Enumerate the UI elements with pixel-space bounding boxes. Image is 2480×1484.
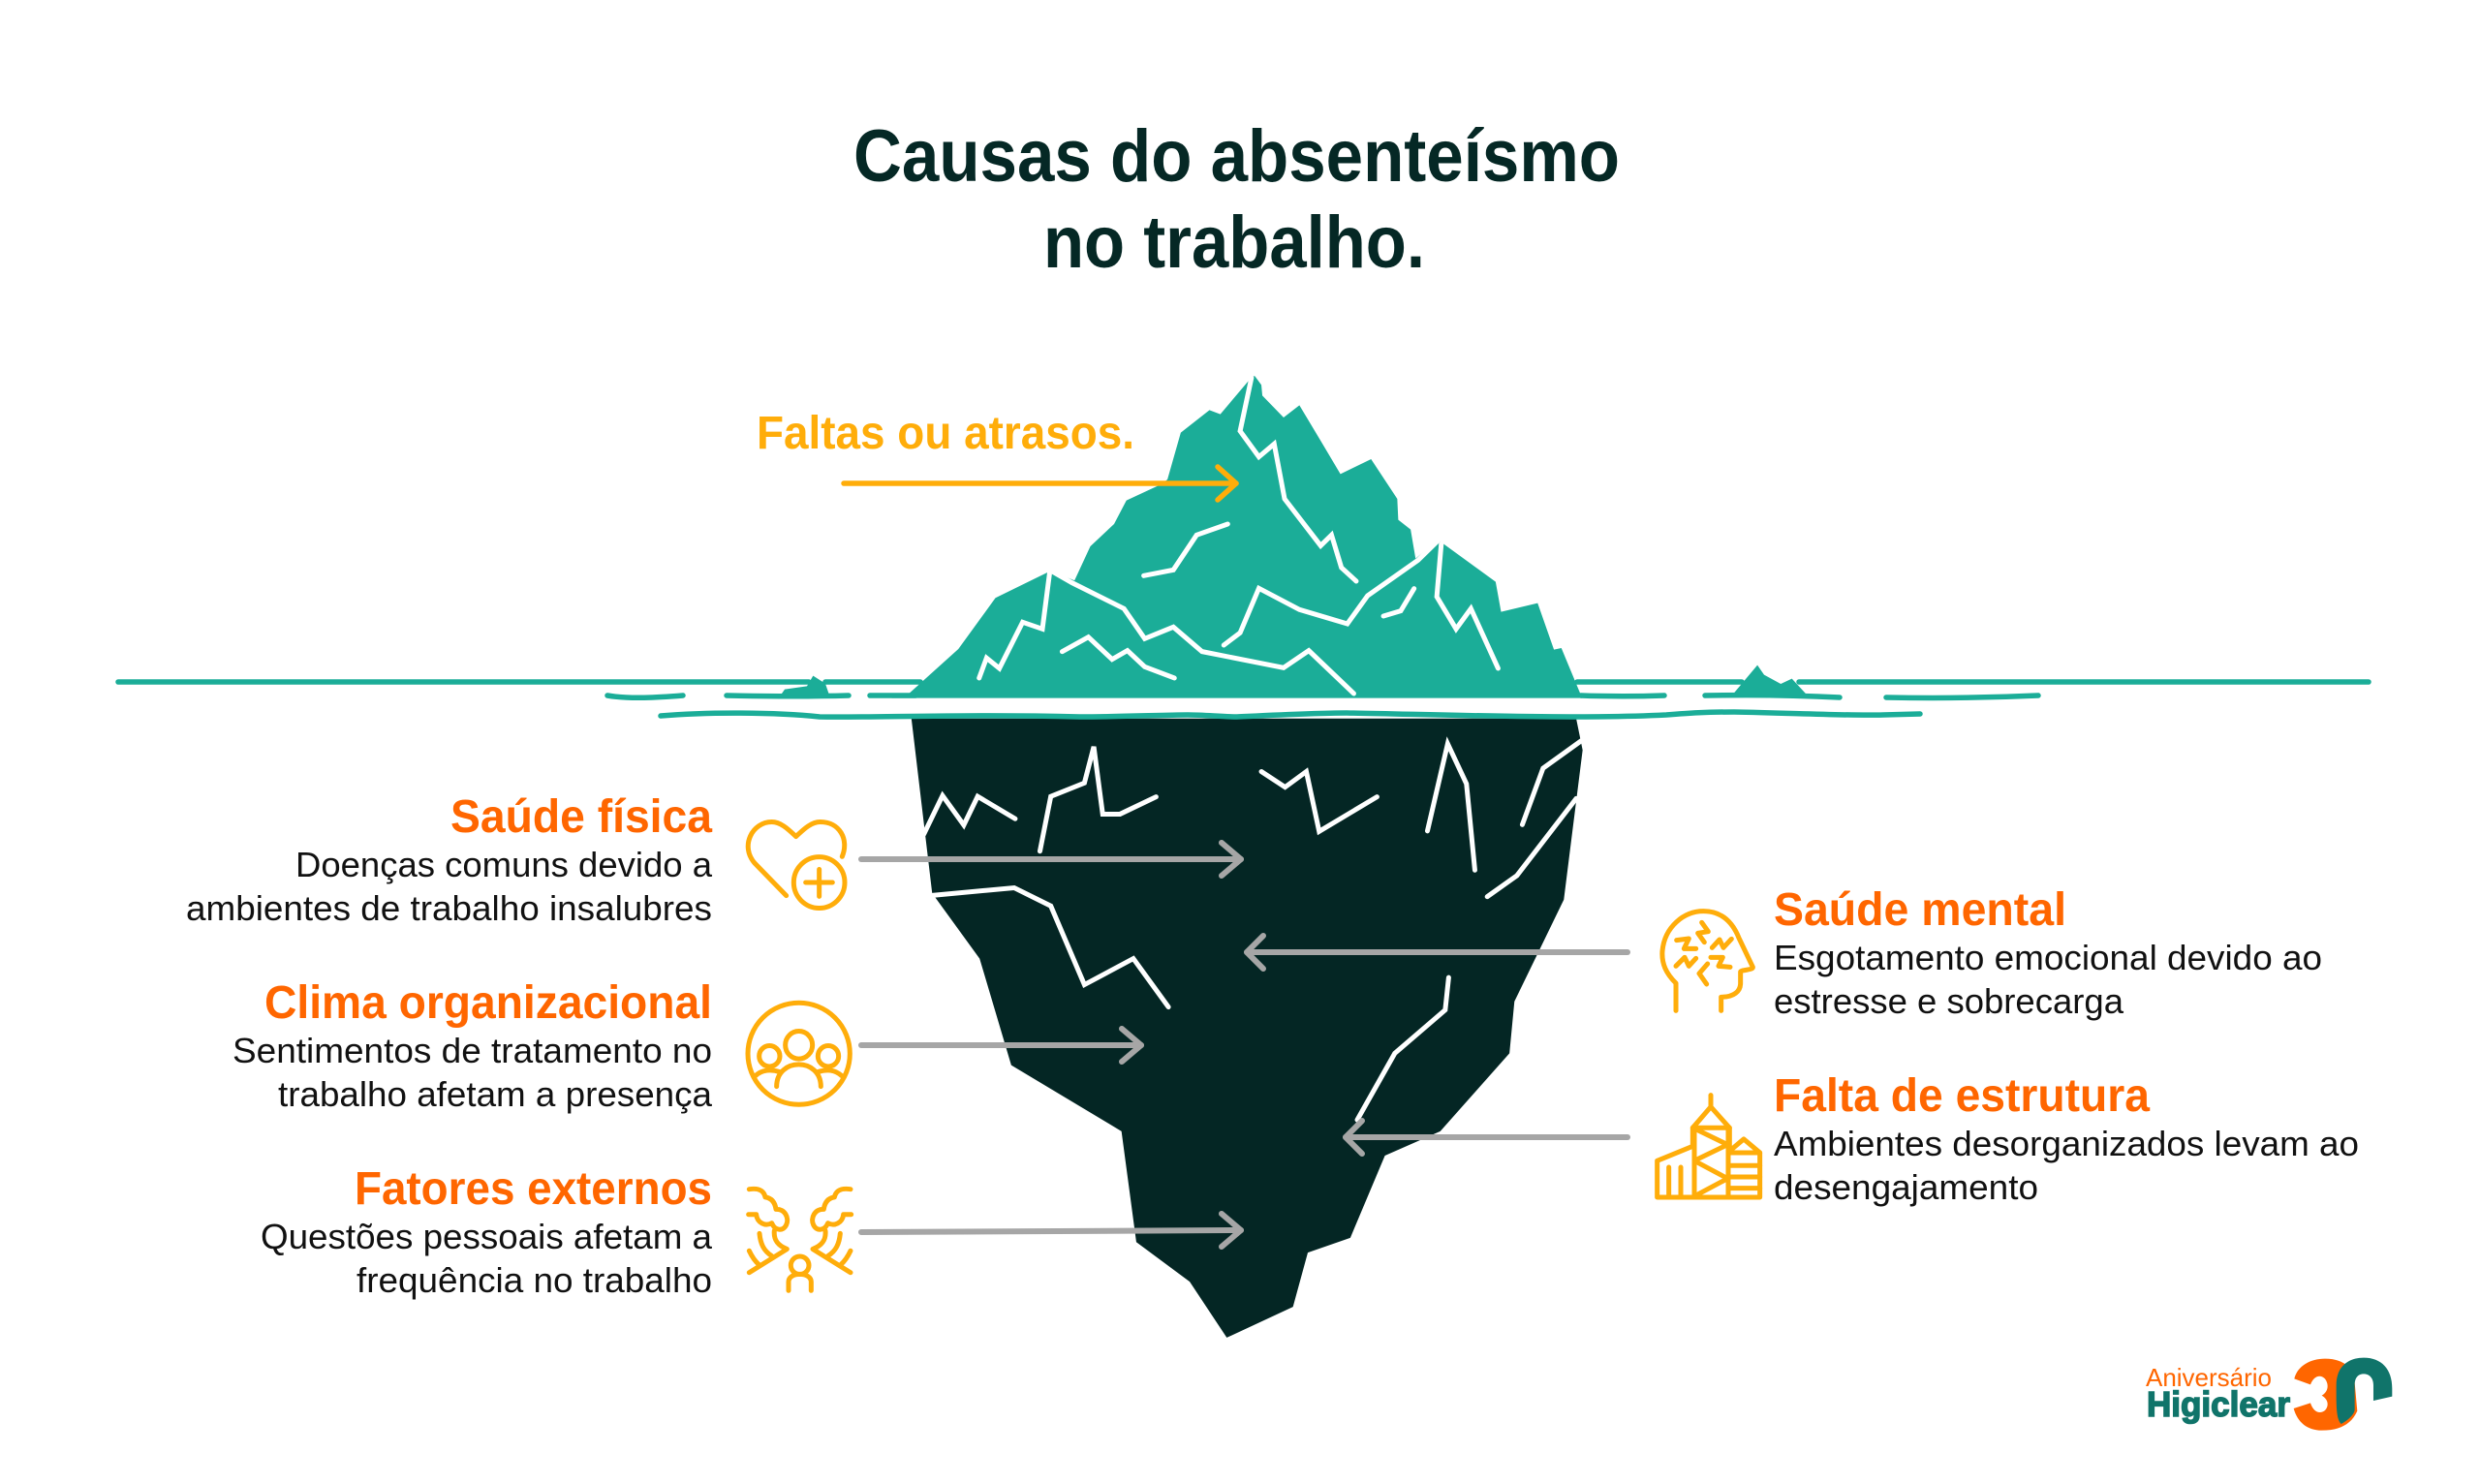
logo xyxy=(2146,1358,2392,1431)
text block: Clima organizacional xyxy=(232,977,713,1114)
text block: Saúde mental xyxy=(1774,884,2322,1021)
text block: Saúde mental: Esgotamento emocional devido ao xyxy=(1774,938,2322,977)
text block: Saúde física: Saúde física xyxy=(450,791,712,843)
text block: Falta de estrutura xyxy=(1774,1070,2359,1207)
title xyxy=(853,115,1620,284)
small iceberg left xyxy=(781,676,829,695)
text block: Fatores externos: Questões pessoais afetam a xyxy=(261,1217,713,1256)
text block: Clima organizacional: trabalho afetam a presença xyxy=(278,1074,713,1114)
logo number 30 xyxy=(2294,1358,2392,1431)
arrow: Fatores externos xyxy=(861,1214,1241,1247)
icon: head with stress xyxy=(1662,912,1752,1010)
logo text: Aniversário xyxy=(2146,1363,2272,1392)
text block: Saúde física: ambientes de trabalho insalubres xyxy=(186,888,712,928)
arrow: Falta de estrutura xyxy=(1346,1121,1628,1154)
text block: Saúde física: Doenças comuns devido a xyxy=(295,845,713,884)
text block: Falta de estrutura: desengajamento xyxy=(1774,1167,2038,1207)
title: no trabalho. xyxy=(1043,201,1425,284)
icon: external factors xyxy=(749,1189,852,1290)
small iceberg right xyxy=(1732,665,1807,695)
icon: group of people xyxy=(748,1003,850,1104)
logo text: Higiclear xyxy=(2147,1384,2290,1424)
text block: Fatores externos: Fatores externos xyxy=(355,1163,712,1215)
arrow: yellow xyxy=(844,467,1236,500)
crack lines top xyxy=(979,378,1498,694)
text block: Clima organizacional: Sentimentos de tratamento no xyxy=(232,1031,712,1070)
arrow: Saúde física xyxy=(861,843,1241,876)
water lines xyxy=(118,682,2369,717)
text block: Falta de estrutura: Ambientes desorganizados levam ao xyxy=(1774,1124,2359,1163)
iceberg bottom xyxy=(912,719,1583,1338)
heading: Faltas ou atrasos: Faltas ou atrasos. xyxy=(757,408,1134,459)
text block: Fatores externos xyxy=(261,1163,713,1300)
text block: Saúde física xyxy=(186,791,713,928)
text block: Fatores externos: frequência no trabalho xyxy=(356,1260,712,1300)
text block: Saúde mental: estresse e sobrecarga xyxy=(1774,981,2124,1021)
crack lines bottom xyxy=(924,741,1581,1120)
arrow: Saúde mental xyxy=(1247,936,1628,969)
text block: Clima organizacional: Clima organizacional xyxy=(264,977,712,1029)
icon: buildings xyxy=(1658,1096,1760,1197)
title: Causas do absenteísmo xyxy=(853,115,1620,198)
text block: Saúde mental: Saúde mental xyxy=(1774,884,2066,936)
icon: heart with plus xyxy=(748,822,845,908)
iceberg top xyxy=(891,376,1582,698)
logo text xyxy=(2146,1363,2290,1424)
arrow: Clima organizacional xyxy=(861,1029,1141,1062)
text block: Falta de estrutura: Falta de estrutura xyxy=(1774,1070,2150,1122)
